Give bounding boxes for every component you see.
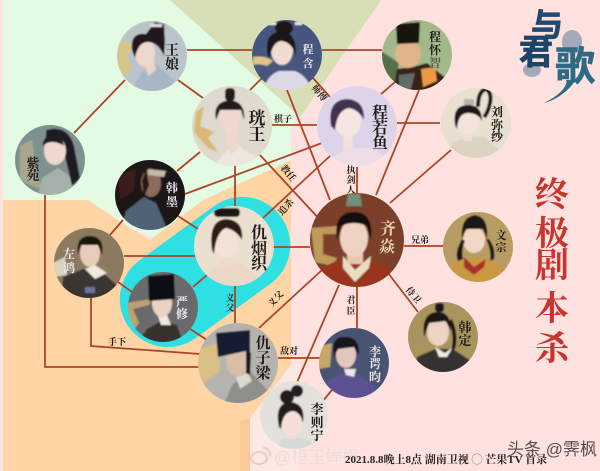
relation labels: 人 [346, 185, 356, 195]
portrait: 程含: 程 [302, 42, 314, 56]
portrait: 程怀智 [381, 19, 453, 91]
relation labels: 教任 [279, 162, 299, 183]
broadcast info: 2021.8.8晚上8点 湖南卫视 ◯ 芒果TV 首录 [345, 452, 547, 466]
portrait: 程怀智: 怀 [429, 42, 442, 57]
relation labels: 侍卫 [404, 284, 424, 305]
title: 终极剧本杀: 极 [535, 215, 569, 253]
portrait: 珖王 [191, 85, 273, 167]
portrait: 李则宁: 宁 [310, 428, 324, 443]
portrait: 刘弥纱: 弥 [491, 117, 504, 132]
portrait: 韩墨: 韩 [166, 180, 178, 195]
portrait: 严修: 修 [176, 306, 188, 321]
title: 终极剧本杀 [535, 176, 571, 368]
portrait: 王娘 [116, 20, 188, 92]
portrait: 程若鱼: 程 [372, 104, 388, 122]
watermark: weibo user: @桓玉婵娟 [274, 448, 359, 467]
portrait: 齐焱: 齐 [380, 219, 396, 238]
portrait: 珖王: 王 [248, 125, 266, 144]
portrait: 紫苑: 紫 [26, 156, 40, 171]
icon: weibo logo [251, 448, 270, 464]
portrait: 李谔昀: 谔 [369, 356, 381, 371]
portrait: 紫苑: 苑 [26, 168, 40, 183]
title: 终极剧本杀: 杀 [535, 330, 571, 368]
relation labels: 敌对 [280, 345, 298, 356]
portrait: 刘弥纱 [440, 87, 512, 159]
portrait: 刘弥纱: 纱 [491, 129, 504, 144]
logo: 与君歌 [519, 7, 595, 103]
portrait: 程若鱼: 鱼 [372, 133, 388, 152]
watermark: toutiao: 头条 @霁枫 [507, 440, 597, 459]
relation labels: 兄弟 [411, 234, 429, 245]
portrait: 李谔昀: 昀 [369, 370, 381, 384]
relation labels [108, 82, 429, 356]
portrait: 韩定 [407, 301, 479, 373]
portrait: 左鸿 [53, 227, 125, 299]
relation labels: 父 [225, 303, 235, 313]
portrait: 刘弥纱: 刘 [491, 104, 503, 119]
portrait: 程含 [251, 19, 323, 91]
portrait: 李谔昀 [318, 327, 390, 399]
relation labels: 追杀 [275, 196, 296, 217]
relationship lines [45, 50, 451, 402]
relation labels: 棋子 [274, 113, 292, 124]
logo flower texture [562, 30, 582, 54]
portrait: 李则宁 [259, 380, 329, 450]
portrait: 李则宁: 李 [310, 402, 324, 417]
portrait: 李谔昀: 李 [369, 344, 381, 359]
title: 终极剧本杀: 剧 [535, 247, 569, 285]
portrait: 韩定: 定 [458, 333, 472, 348]
relation labels: 义父 [266, 288, 286, 309]
logo: 与君歌: 与 [531, 7, 563, 43]
portrait: 文宗 [442, 211, 514, 283]
portrait: 珖王: 珖 [248, 109, 266, 128]
portrait: 仇子梁: 子 [255, 350, 271, 367]
portrait: 程含: 含 [302, 56, 314, 70]
portrait: 程若鱼: 若 [372, 118, 388, 137]
relation labels: 臣 [346, 305, 356, 316]
portrait: 仇子梁: 梁 [255, 364, 272, 382]
portrait: 仇烟织: 织 [251, 255, 269, 273]
portrait: 韩墨: 墨 [166, 195, 179, 209]
portrait: 王娘: 王 [165, 43, 179, 59]
portrait: 程怀智: 程 [429, 29, 441, 44]
portrait: 仇烟织: 烟 [250, 239, 267, 258]
portrait: 齐焱 [309, 192, 405, 288]
portrait: 韩墨 [114, 159, 186, 231]
portrait: 左鸿: 鸿 [63, 260, 75, 275]
relation labels: 君 [346, 295, 356, 305]
portrait: 文宗: 文 [496, 228, 506, 242]
relation labels: 手下 [108, 336, 127, 347]
title: 终极剧本杀: 终 [535, 176, 569, 214]
relation labels: 师傅 [310, 82, 330, 103]
logo: 与君歌: 君 [519, 34, 553, 72]
portrait: 程怀智: 智 [429, 55, 441, 70]
portrait: 仇子梁: 仇 [255, 335, 271, 352]
portrait: 韩定: 韩 [458, 320, 472, 335]
logo: 与君歌: 歌 [555, 45, 595, 89]
portrait: 文宗: 宗 [496, 241, 508, 254]
portrait: 仇子梁 [197, 322, 279, 404]
relation labels: 剑 [346, 174, 356, 185]
portrait: 严修: 严 [176, 294, 188, 309]
portrait: 王娘: 娘 [165, 56, 179, 73]
portrait: 齐焱: 焱 [379, 237, 395, 256]
portrait: 仇烟织 [193, 205, 275, 287]
relation labels: 义 [225, 293, 235, 303]
portrait: 严修 [127, 271, 199, 343]
cyan highlight ellipse [101, 178, 309, 366]
portrait: 紫苑 [14, 124, 86, 196]
portrait: 李则宁: 则 [310, 415, 324, 430]
portrait: 仇烟织: 仇 [251, 224, 267, 242]
portrait: 左鸿: 左 [63, 246, 75, 261]
title: 终极剧本杀: 本 [535, 290, 569, 328]
relation labels: 执 [346, 164, 356, 175]
portrait: 程若鱼 [316, 85, 398, 167]
